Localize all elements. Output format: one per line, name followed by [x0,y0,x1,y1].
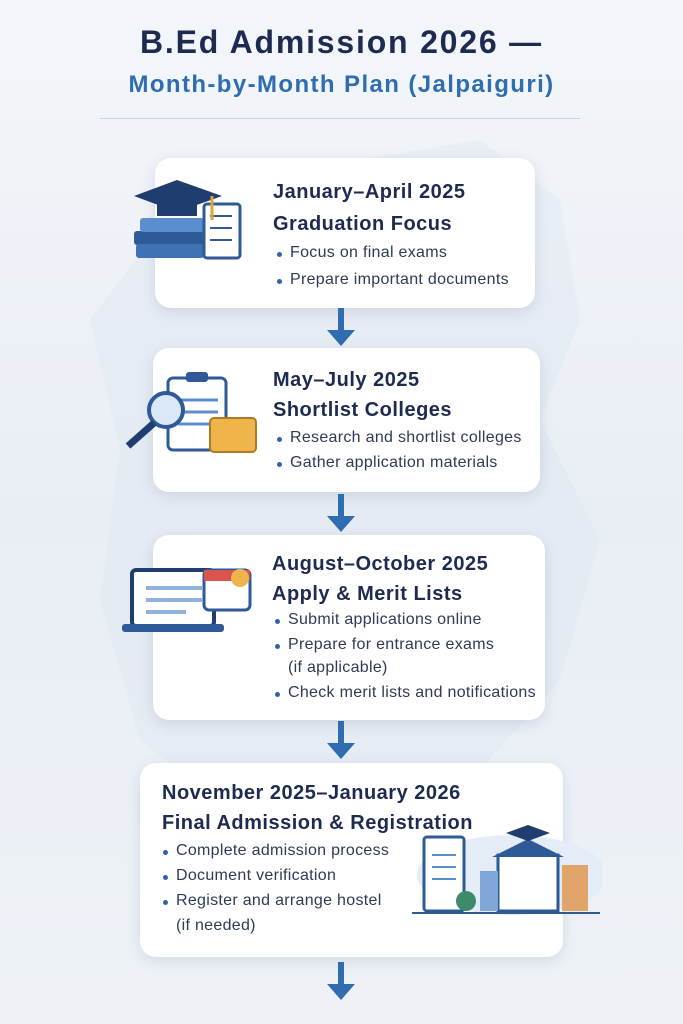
icon: college building [412,825,602,915]
panel: January-April [155,158,535,308]
panel: November-January: November 2025–January 2026 [162,782,461,804]
panel: August-October: Apply & Merit Lists [272,583,463,605]
panel: January-April: Graduation Focus [273,213,452,235]
panel: November-January: Complete admission process [176,842,389,859]
arrow 2 [327,494,355,532]
panel: January-April: January–April 2025 [273,181,465,203]
panel: August-October [153,535,545,720]
panel: November-January: Document verification [176,867,336,884]
panel: November-January: Final Admission & Registration [162,812,473,834]
panel: May-July [153,348,540,492]
panel: November-January: (if needed) [176,917,256,934]
panel: January-April: Focus on final exams [290,244,447,261]
panel: January-April: Prepare important documents [290,271,509,288]
icon: graduation books [134,180,242,260]
subtitle: Month-by-Month Plan (Jalpaiguri) [128,71,555,98]
arrow 3 [327,721,355,759]
background map silhouette [60,120,620,880]
panel: May-July: May–July 2025 [273,369,420,391]
panel: May-July: Gather application materials [290,454,498,471]
icon: clipboard magnifier briefcase [126,372,257,453]
panel: May-July: Research and shortlist colleges [290,429,522,446]
title: B.Ed Admission 2026 — [140,24,543,60]
panel: August-October: August–October 2025 [272,553,488,575]
icon: laptop calendar [122,568,252,632]
panel: August-October: (if applicable) [288,659,388,676]
panel: May-July: Shortlist Colleges [273,399,452,421]
arrow 4 [327,962,355,1000]
panel: August-October: Prepare for entrance exams [288,636,494,653]
panel: November-January: Register and arrange hostel [176,892,382,909]
panel: August-October: Check merit lists and notifications [288,684,536,701]
panel: August-October: Submit applications online [288,611,482,628]
panel: November-January [140,763,563,957]
arrow 1 [327,308,355,346]
